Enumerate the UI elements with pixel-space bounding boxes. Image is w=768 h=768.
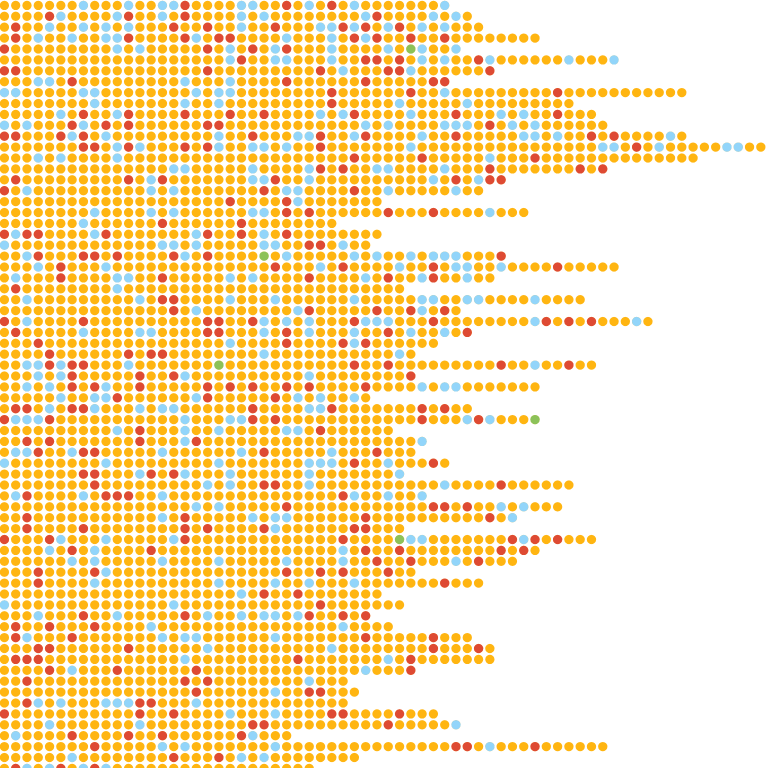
- row 39: [4, 415, 535, 424]
- row 45: [4, 480, 569, 490]
- row 3: [4, 23, 479, 32]
- row 44: [4, 469, 400, 479]
- row 25: [4, 262, 614, 272]
- row 54: [4, 578, 479, 588]
- row 38: [4, 404, 468, 413]
- row 29: [4, 306, 456, 315]
- row 69: [4, 742, 603, 751]
- row 20: [4, 208, 524, 217]
- row 13: [4, 132, 682, 141]
- row 62: [4, 666, 411, 675]
- row 64: [4, 687, 355, 697]
- row 17: [4, 175, 501, 184]
- row 53: [4, 568, 411, 577]
- row 8: [4, 77, 445, 86]
- row 49: [4, 524, 400, 533]
- row 35: [4, 371, 411, 381]
- row 63: [4, 677, 343, 686]
- row 21: [4, 219, 332, 228]
- row 16: [4, 164, 603, 174]
- row 10: [4, 99, 569, 108]
- row 58: [4, 622, 389, 631]
- row 61: [4, 655, 490, 664]
- row 67: [4, 720, 456, 729]
- row 51: [4, 546, 535, 555]
- row 6: [4, 55, 614, 65]
- row 23: [4, 241, 366, 250]
- row 36: [4, 382, 535, 392]
- row 65: [4, 698, 343, 708]
- row 59: [4, 633, 468, 642]
- row 50: [4, 535, 592, 544]
- row 41: [4, 437, 422, 446]
- row 56: [4, 600, 400, 610]
- row 31: [4, 328, 468, 337]
- row 28: [4, 295, 580, 304]
- row 27: [4, 284, 400, 293]
- row 46: [4, 491, 422, 501]
- row 60: [4, 644, 490, 653]
- row 30: [4, 317, 648, 326]
- row 42: [4, 448, 411, 457]
- row 71: [4, 764, 310, 768]
- row 22: [4, 230, 377, 239]
- row 52: [4, 557, 513, 566]
- row 47: [4, 502, 558, 511]
- row 70: [4, 753, 355, 762]
- row 40: [4, 426, 389, 435]
- row 15: [4, 153, 693, 163]
- row 12: [4, 121, 603, 130]
- row 7: [4, 66, 490, 75]
- row 33: [4, 350, 411, 359]
- row 11: [4, 110, 592, 119]
- row 5: [4, 44, 456, 54]
- row 1: [4, 1, 445, 10]
- row 4: [4, 33, 535, 43]
- row 14: [4, 142, 761, 152]
- row 24: [4, 251, 501, 261]
- row 9: [4, 88, 682, 97]
- row 43: [4, 459, 445, 468]
- row 34: [4, 360, 592, 370]
- row 18: [4, 186, 479, 195]
- row 37: [4, 393, 366, 402]
- row 26: [4, 273, 490, 283]
- row 55: [4, 589, 377, 599]
- row 57: [4, 611, 366, 620]
- row 68: [4, 731, 287, 740]
- row 48: [4, 513, 513, 522]
- row 2: [4, 12, 468, 21]
- row 19: [4, 197, 377, 206]
- row 66: [4, 709, 434, 719]
- row 32: [4, 339, 434, 348]
